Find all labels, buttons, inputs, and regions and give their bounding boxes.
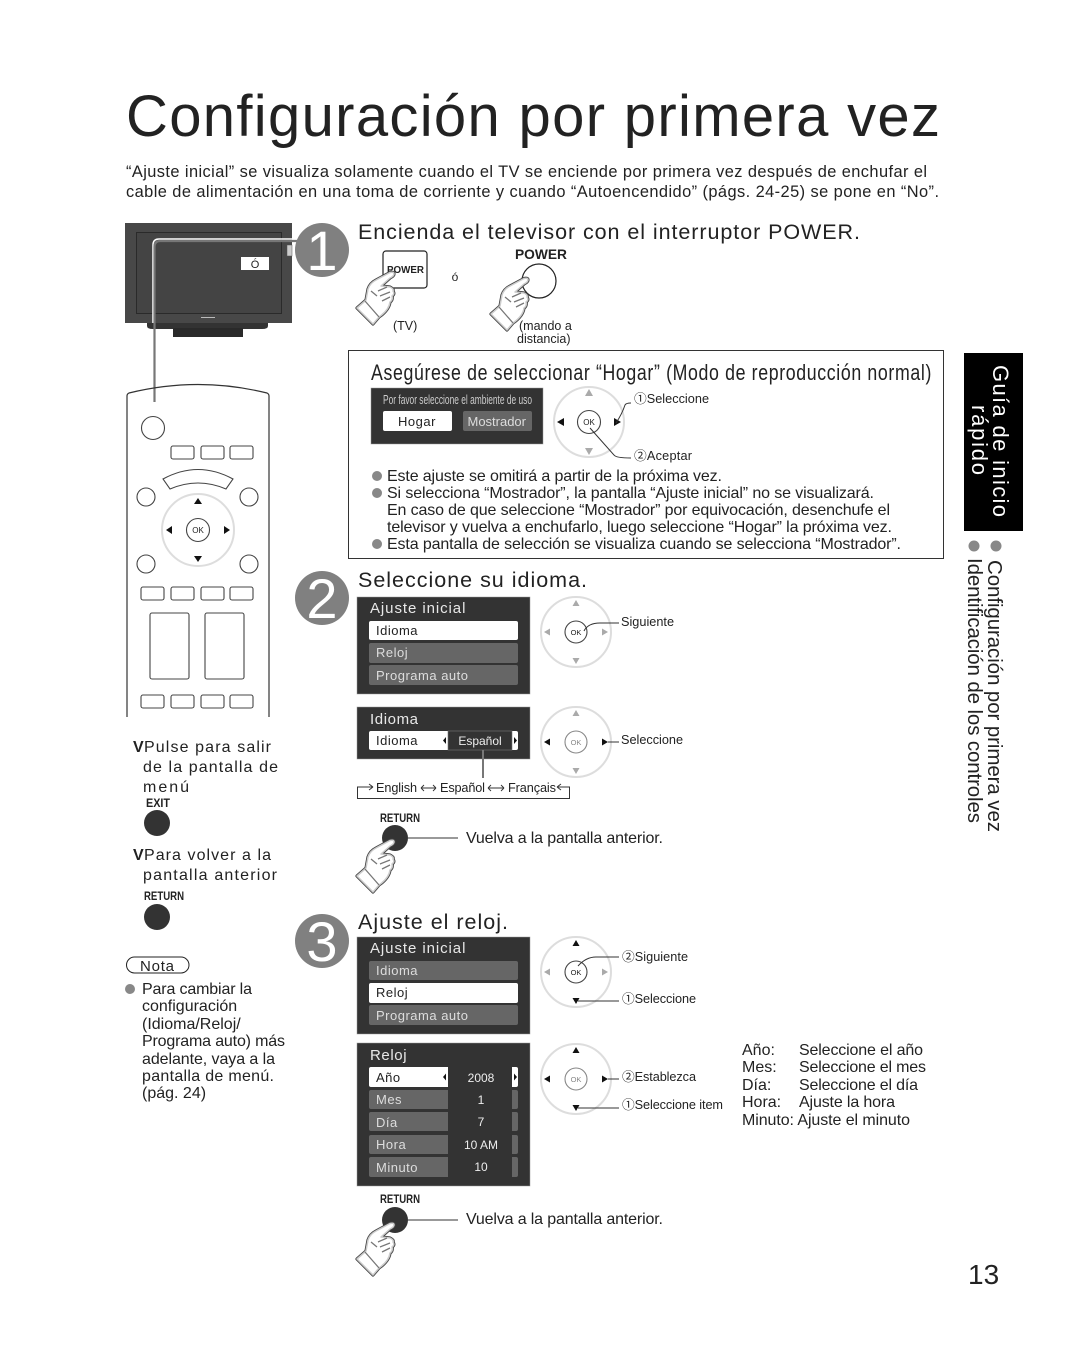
menu: reloj: [357, 1043, 530, 1186]
note: adelante, vaya a la: [142, 1051, 275, 1068]
note: Nota: [140, 958, 175, 975]
clock settings legend: Ajuste la hora: [799, 1094, 895, 1111]
language cycle: [358, 781, 570, 798]
directional pad: next and select: OK: [571, 968, 581, 977]
directional pad: set and select item: [541, 1044, 619, 1114]
return instruction: [133, 847, 278, 930]
step 1 badge: [295, 219, 349, 282]
exit instruction: V: [133, 739, 144, 756]
menu: reloj: 10 AM: [464, 1138, 498, 1152]
menu: ajuste inicial, reloj: Ajuste inicial: [370, 940, 466, 957]
power buttons: POWER: [387, 264, 424, 276]
labels: siguiente, seleccione: ②Siguiente: [622, 950, 688, 964]
clock settings legend: Seleccione el día: [799, 1077, 918, 1094]
menu: ajuste inicial, idioma: [357, 597, 530, 694]
notes list: Esta pantalla de selección se visualiza cuando se selecciona “Mostrador”.: [387, 536, 901, 553]
power buttons: distancia): [517, 332, 570, 346]
mode selection screen: Mostrador: [468, 414, 527, 429]
clock settings legend: Seleccione el año: [799, 1042, 923, 1059]
title: Configuración por primera vez: [126, 84, 940, 149]
power buttons: (TV): [393, 319, 417, 333]
note: pantalla de menú.: [142, 1068, 274, 1085]
menu: ajuste inicial, idioma: Ajuste inicial: [370, 600, 466, 617]
directional pad: next: [541, 597, 619, 667]
side navigation: [963, 540, 1006, 832]
menu: ajuste inicial, reloj: Idioma: [376, 963, 418, 978]
clock settings legend: Mes:: [742, 1059, 777, 1076]
notes list: Este ajuste se omitirá a partir de la próxima vez.: [387, 468, 722, 485]
note: Programa auto) más: [142, 1033, 285, 1050]
labels: establezca, seleccione item: ②Establezca: [622, 1070, 697, 1084]
remote control: [127, 384, 269, 717]
return instruction: RETURN: [144, 889, 184, 903]
directional pad: [554, 387, 631, 458]
return button, step 2: RETURN: [380, 811, 420, 825]
menu: idioma: Idioma: [376, 733, 418, 748]
television: [125, 223, 292, 337]
labels: siguiente, seleccione: ①Seleccione: [622, 992, 696, 1006]
directional pad: set and select item: OK: [571, 1075, 581, 1084]
menu: reloj: 10: [474, 1160, 488, 1174]
labels: siguiente, seleccione: [622, 950, 696, 1006]
remote control: OK: [192, 526, 204, 535]
side tab: [964, 353, 1023, 531]
notes list: En caso de que seleccione “Mostrador” por equivocación, desenchufe el: [387, 502, 890, 519]
directional pad: select: [541, 707, 619, 777]
menu: ajuste inicial, idioma: Programa auto: [376, 668, 468, 683]
menu: ajuste inicial, reloj: Reloj: [376, 985, 408, 1000]
side tab: Guía de inicio: [988, 365, 1013, 517]
step 3 heading: Ajuste el reloj.: [358, 910, 508, 934]
dpad labels: ②Aceptar: [634, 449, 693, 463]
label: seleccione: Seleccione: [621, 733, 683, 747]
menu: ajuste inicial, idioma: Idioma: [376, 623, 418, 638]
menu: reloj: Año: [376, 1070, 401, 1085]
menu: reloj: Reloj: [370, 1047, 407, 1064]
dpad labels: ①Seleccione: [634, 392, 709, 406]
notice heading: Asegúrese de seleccionar “Hogar” (Modo de reproducción normal): [371, 360, 932, 385]
label: siguiente: Siguiente: [621, 615, 674, 629]
notes list: [372, 468, 901, 553]
mode selection screen: Hogar: [398, 414, 436, 429]
clock settings legend: Seleccione el mes: [799, 1059, 926, 1076]
menu: reloj: 2008: [468, 1071, 495, 1085]
intro text: cable de alimentación en una toma de corriente y cuando “Autoencendido” (págs. 24-25) se pone en “No”.: [126, 183, 939, 201]
exit instruction: Pulse para salir: [144, 739, 272, 756]
labels: establezca, seleccione item: [622, 1070, 723, 1112]
menu: reloj: Minuto: [376, 1160, 418, 1175]
clock settings legend: [742, 1042, 926, 1129]
menu: idioma: [357, 707, 530, 778]
clock settings legend: Año:: [742, 1042, 775, 1059]
note: (Idioma/Reloj/: [142, 1016, 241, 1033]
return button, step 2: Vuelva a la pantalla anterior.: [466, 830, 663, 847]
dpad labels: [634, 392, 709, 463]
side navigation: Configuración por primera vez: [983, 560, 1006, 832]
return instruction: Para volver a la: [144, 847, 271, 864]
power buttons: [357, 246, 572, 346]
directional pad: next: OK: [571, 628, 581, 637]
side navigation: Identificación de los controles: [963, 558, 986, 823]
step 2 badge: [295, 567, 349, 630]
exit instruction: EXIT: [146, 796, 171, 810]
exit instruction: de la pantalla de: [143, 759, 278, 776]
notes list: televisor y vuelva a enchufarlo, luego seleccione “Hogar” la próxima vez.: [387, 519, 892, 536]
step 2 heading: Seleccione su idioma.: [358, 568, 587, 592]
step 1 badge: 1: [306, 219, 338, 282]
step 3 badge: [295, 910, 349, 973]
menu: idioma: Español: [458, 734, 502, 748]
menu: reloj: 1: [478, 1093, 485, 1107]
panel: home mode notice: [348, 350, 944, 558]
menu: reloj: Mes: [376, 1092, 402, 1107]
return button, step 2: [357, 811, 663, 892]
clock settings legend: Minuto: Ajuste el minuto: [742, 1112, 910, 1129]
return instruction: V: [133, 847, 144, 864]
language cycle: English: [376, 781, 417, 795]
labels: establezca, seleccione item: ①Seleccione item: [622, 1098, 723, 1112]
note: configuración: [142, 998, 237, 1015]
step 2 badge: 2: [306, 567, 338, 630]
step 3 badge: 3: [306, 910, 338, 973]
return button, step 3: RETURN: [380, 1192, 420, 1206]
menu: ajuste inicial, reloj: [357, 937, 530, 1034]
clock settings legend: Hora:: [742, 1094, 781, 1111]
menu: ajuste inicial, idioma: Reloj: [376, 645, 408, 660]
exit instruction: menú: [143, 779, 189, 796]
mode selection screen: Por favor seleccione el ambiente de uso: [383, 392, 532, 407]
intro text: [126, 163, 939, 201]
return button, step 3: [357, 1192, 663, 1275]
exit instruction: [133, 739, 278, 836]
note: Para cambiar la: [142, 981, 252, 998]
return button, step 3: Vuelva a la pantalla anterior.: [466, 1211, 663, 1228]
menu: reloj: Hora: [376, 1137, 406, 1152]
directional pad: OK: [583, 418, 595, 427]
language cycle: Français: [508, 781, 556, 795]
notes list: Si selecciona “Mostrador”, la pantalla “Ajuste inicial” no se visualizará.: [387, 485, 874, 502]
language cycle: Español: [440, 781, 485, 795]
side tab: rápido: [967, 405, 992, 475]
callout line from TV to remote: [153, 239, 298, 402]
note: (pág. 24): [142, 1085, 206, 1102]
return instruction: pantalla anterior: [143, 867, 278, 884]
mode selection screen: [371, 388, 543, 444]
menu: reloj: Día: [376, 1115, 398, 1130]
step 1 heading: Encienda el televisor con el interruptor POWER.: [358, 220, 860, 244]
power buttons: ó: [452, 270, 459, 284]
menu: reloj: 7: [478, 1115, 485, 1129]
directional pad: next and select: [541, 937, 619, 1007]
note: [125, 957, 285, 1102]
menu: idioma: Idioma: [370, 711, 419, 728]
television: Ó: [251, 258, 260, 271]
page number: 13: [968, 1259, 999, 1290]
directional pad: select: OK: [571, 738, 581, 747]
power buttons: POWER: [515, 246, 567, 262]
intro text: “Ajuste inicial” se visualiza solamente cuando el TV se enciende por primera vez después de enchufar el: [126, 163, 927, 181]
menu: ajuste inicial, reloj: Programa auto: [376, 1008, 468, 1023]
power buttons: (mando a: [519, 319, 572, 333]
clock settings legend: Día:: [742, 1077, 771, 1094]
